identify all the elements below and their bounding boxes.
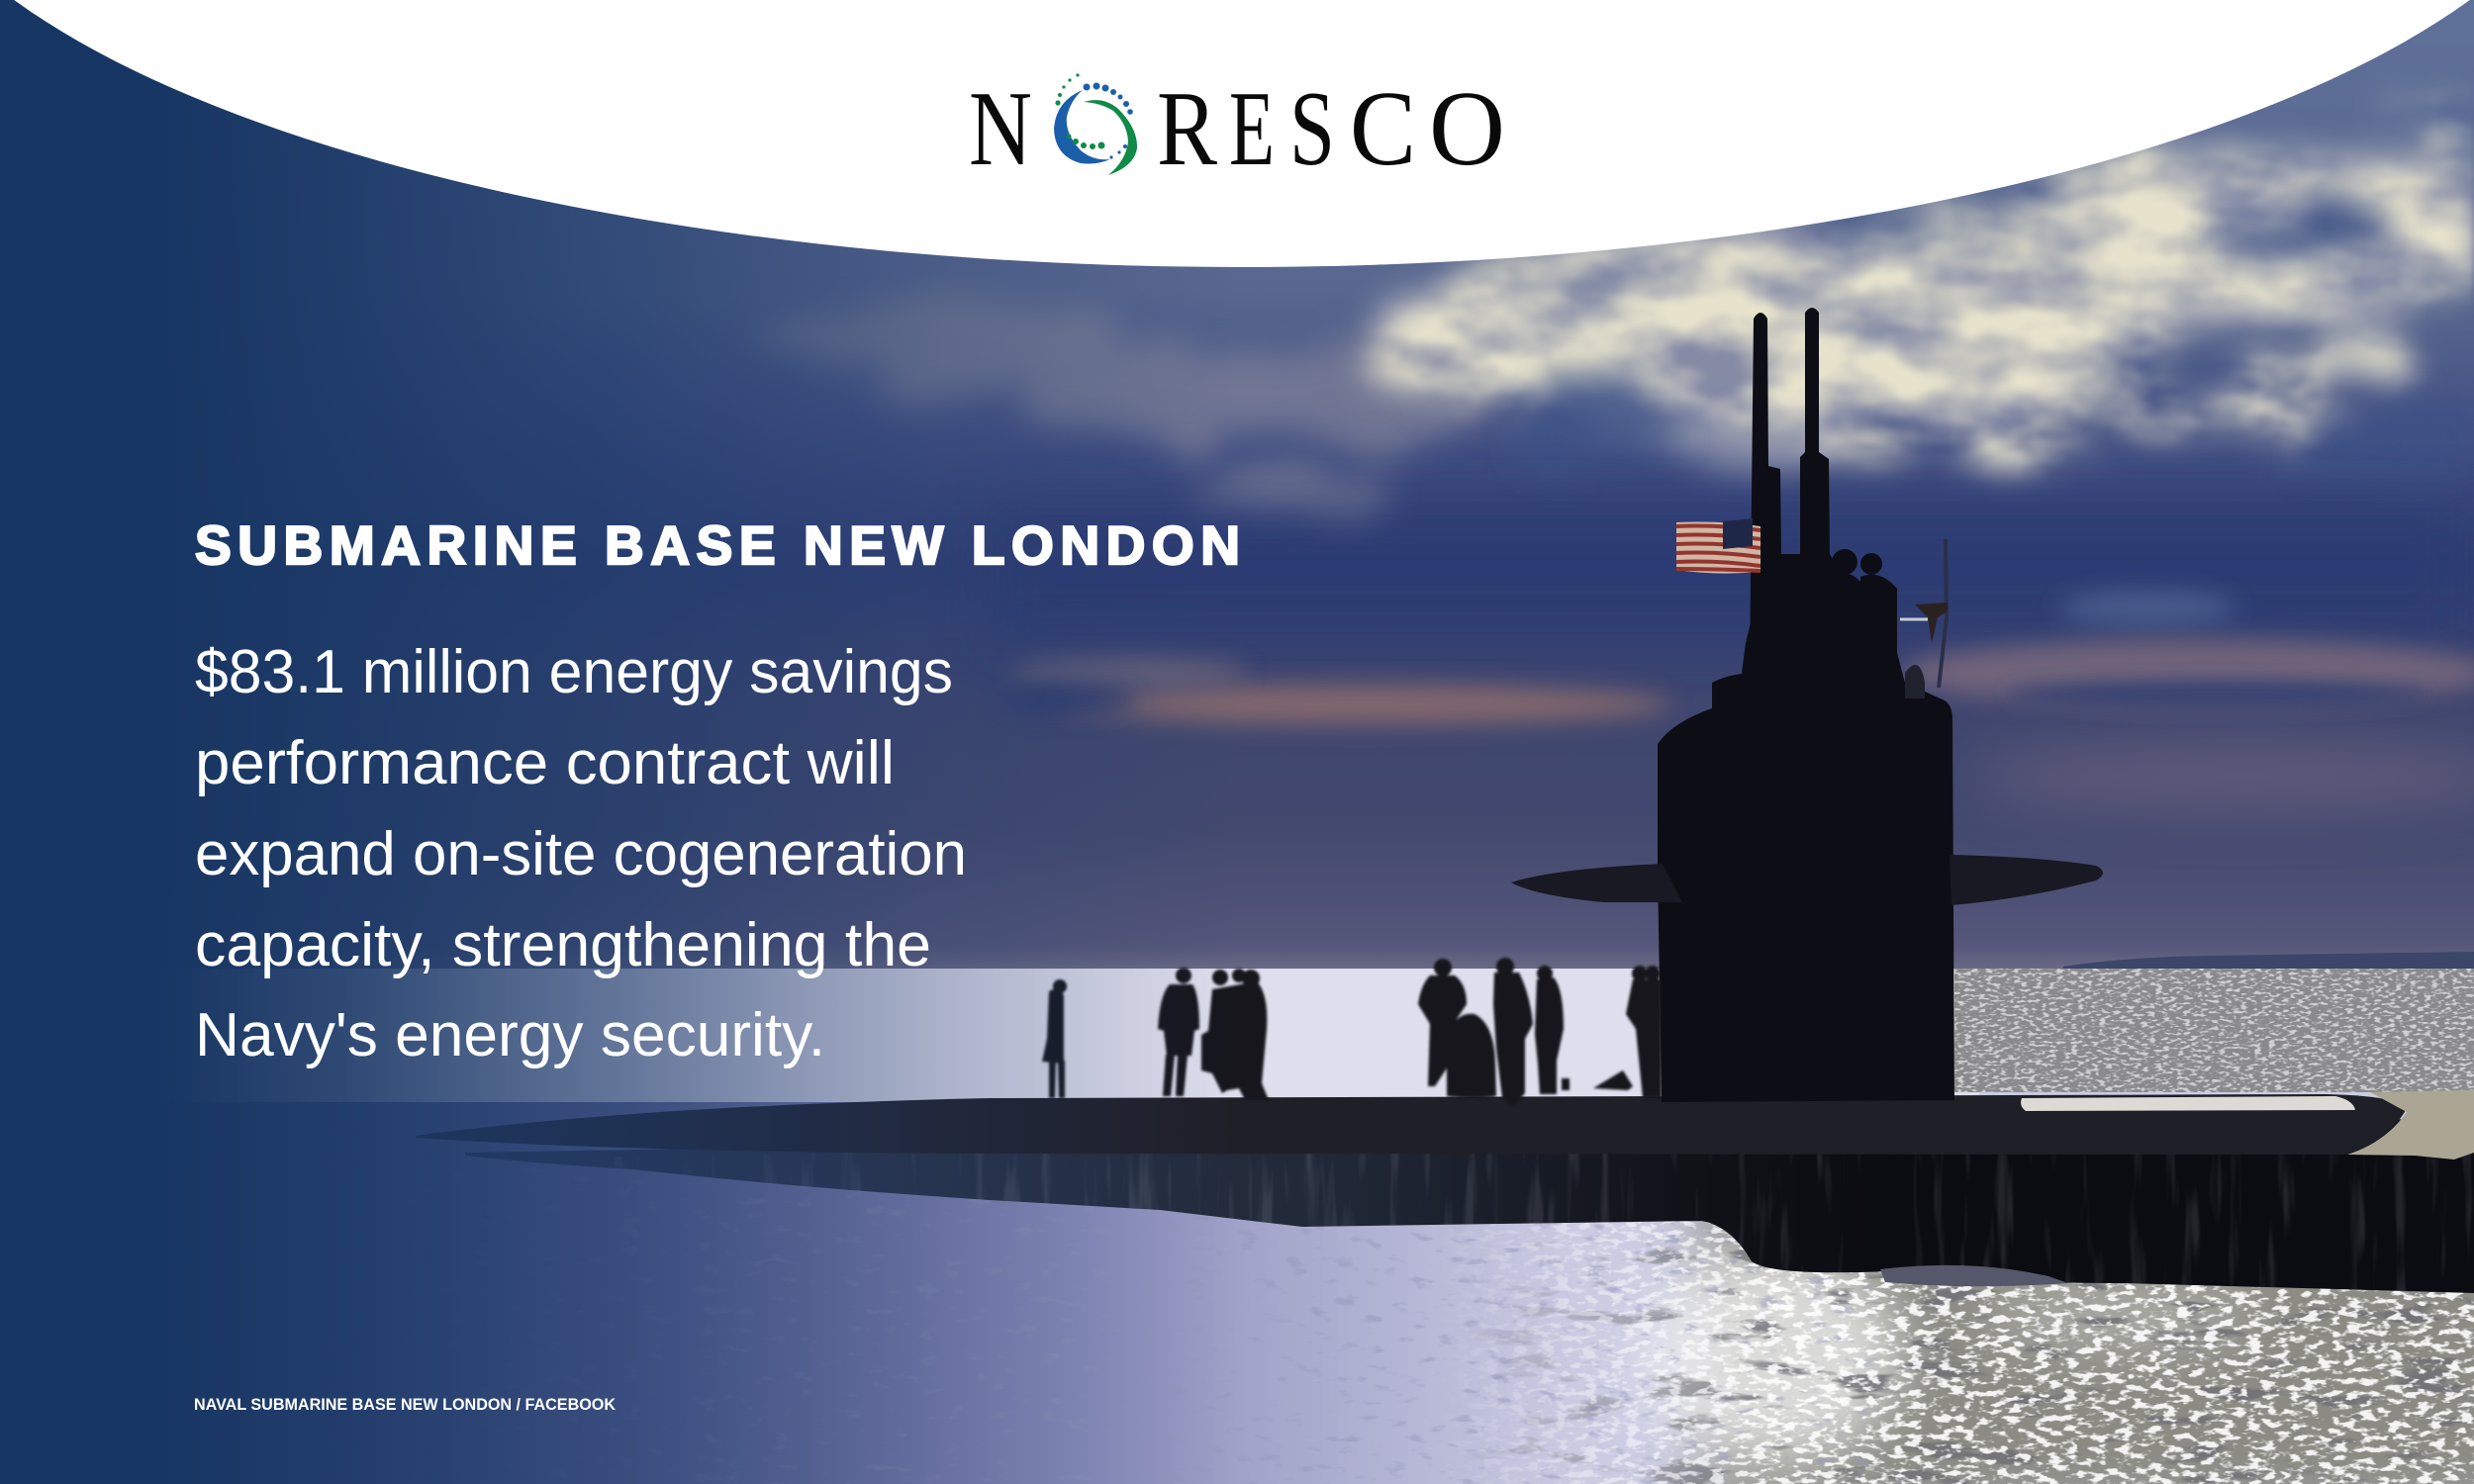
person 5 <box>1493 958 1533 1106</box>
submarine sail with masts and fairwater planes <box>1511 308 2103 1102</box>
hull streaks <box>769 1154 2472 1291</box>
lighter patch in dark band <box>2058 591 2236 626</box>
dim clouds mid sky <box>762 287 1484 512</box>
dark band <box>990 505 2474 638</box>
crew on sail <box>1742 549 1910 698</box>
person 6 <box>1535 966 1564 1094</box>
person 7 <box>1626 966 1662 1098</box>
body text: capacity, strengthening the <box>195 911 931 979</box>
white curved header <box>0 0 2474 267</box>
person 4 <box>1418 959 1467 1086</box>
body text: $83.1 million energy savings <box>195 638 953 706</box>
sky with clouds <box>0 0 2474 974</box>
cloud body under bright streaks <box>1385 139 2474 445</box>
equipment bag <box>1447 1014 1496 1098</box>
deck band <box>416 1094 2405 1155</box>
logo wordmark letters: N <box>969 70 1032 188</box>
person 1 <box>1042 979 1067 1098</box>
body text: Navy's energy security. <box>195 1001 825 1069</box>
small deck gear <box>1562 1070 1633 1090</box>
photo credit: NAVAL SUBMARINE BASE NEW LONDON / FACEBOOK <box>194 1395 617 1414</box>
dark cloud patches <box>1534 195 2474 480</box>
water <box>249 969 2474 1484</box>
logo ring icon <box>1054 73 1137 175</box>
lit reflection under hull <box>1880 1265 2068 1286</box>
body text: expand on-site cogeneration <box>195 820 967 888</box>
bright clouds <box>1395 134 2474 450</box>
deck highlight <box>2021 1096 2355 1111</box>
person 2 <box>1158 968 1199 1096</box>
logo wordmark letters: S <box>1289 70 1335 188</box>
heading: SUBMARINE BASE NEW LONDON <box>195 514 1240 576</box>
crew on deck <box>1042 958 1662 1106</box>
distant shoreline <box>2063 952 2474 970</box>
logo: NORESCO <box>969 70 1505 188</box>
logo wordmark letters <box>969 70 1505 188</box>
submarine hull <box>416 1090 2474 1296</box>
bow wake <box>2347 1090 2474 1159</box>
logo wordmark letters: R <box>1157 70 1217 188</box>
group of three <box>1201 969 1269 1100</box>
orange glow <box>1059 685 1672 724</box>
logo wordmark letters: O <box>1429 70 1505 188</box>
logo wordmark letters: E <box>1229 70 1275 188</box>
icon: American flag <box>1676 518 1760 574</box>
logo wordmark letters: C <box>1350 70 1416 188</box>
radar and antenna <box>1900 539 1948 698</box>
body text: performance contract will <box>195 729 895 797</box>
body text <box>195 638 967 1069</box>
